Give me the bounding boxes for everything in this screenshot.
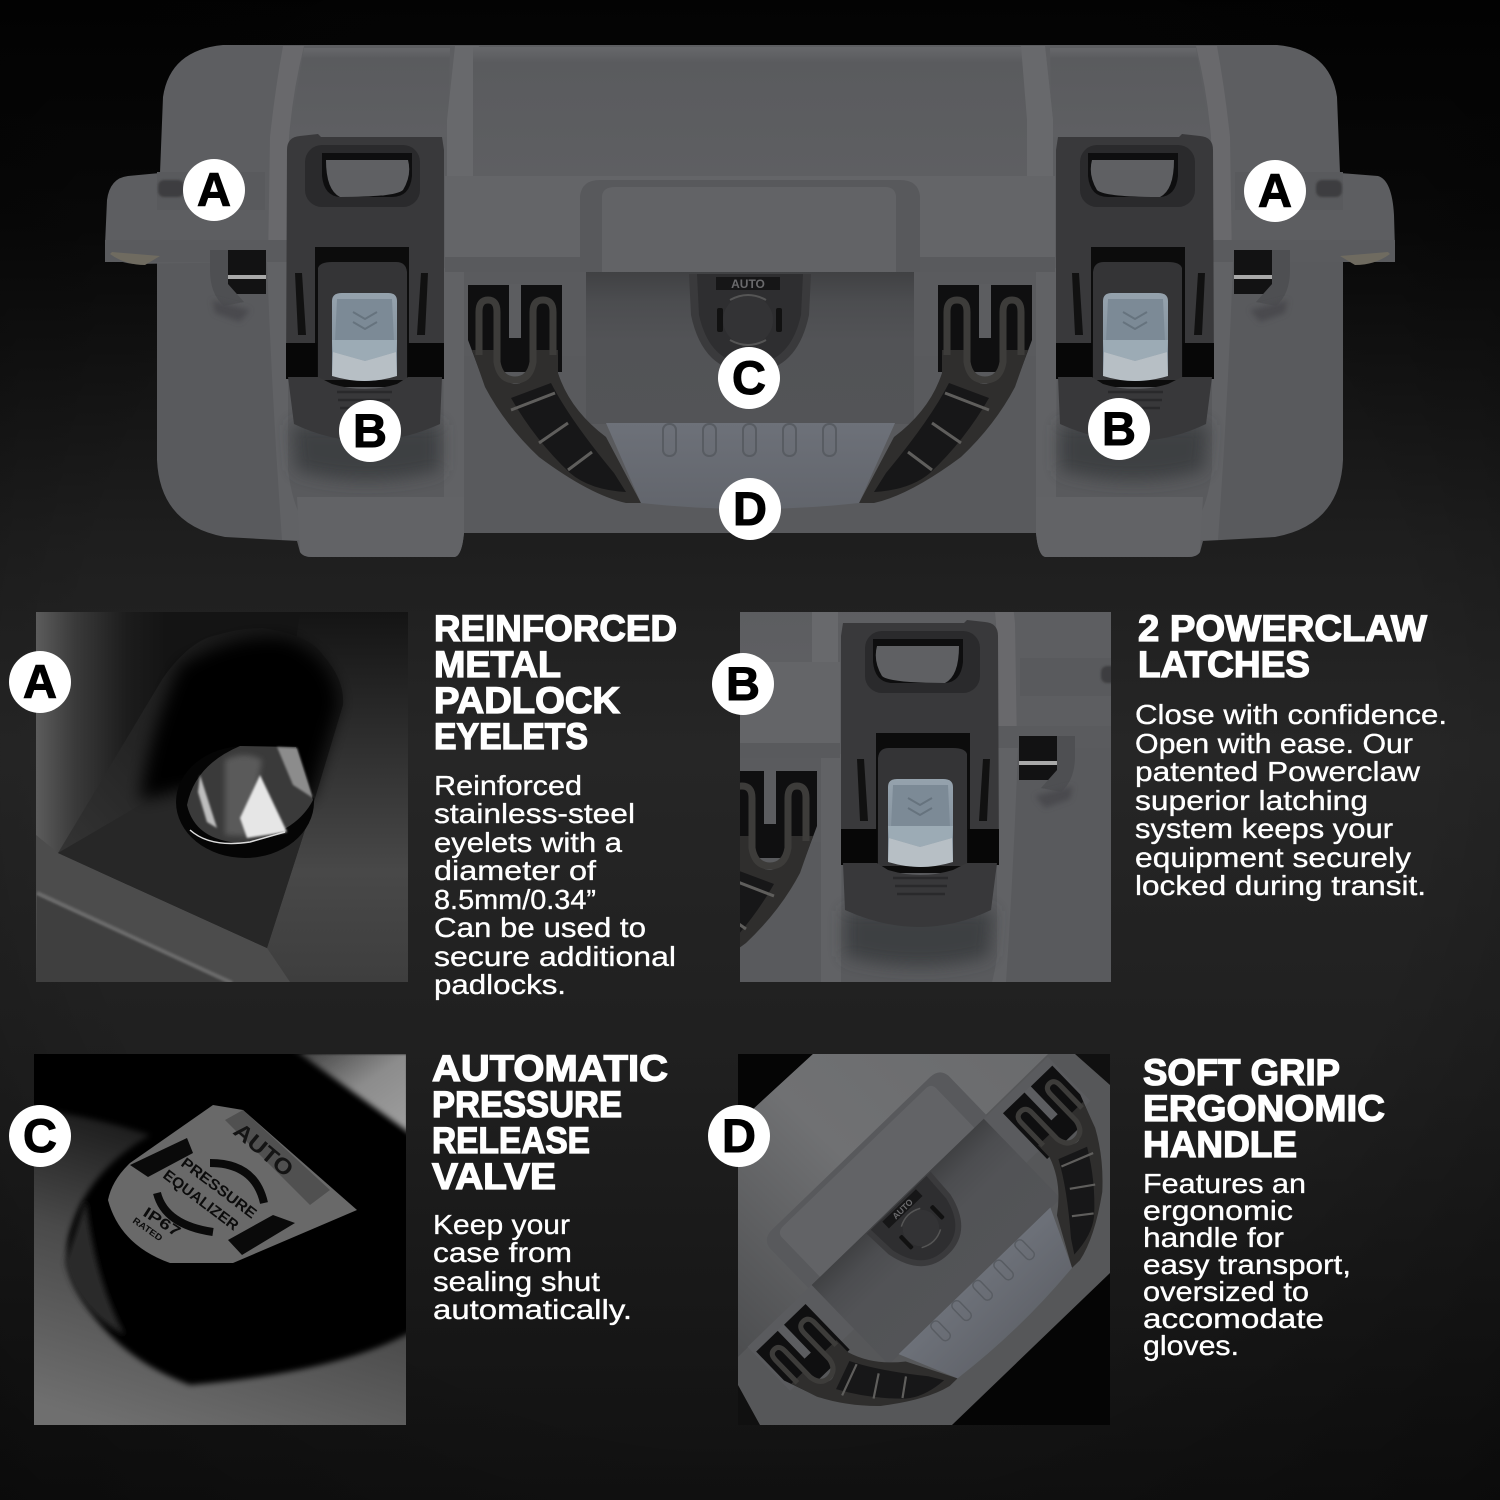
lid inner rib xyxy=(447,46,479,176)
heading D xyxy=(1143,1052,1385,1165)
heading B xyxy=(1138,608,1427,685)
body text D xyxy=(1143,1168,1351,1361)
dark valve body xyxy=(25,1045,415,1385)
valve face: AUTO xyxy=(229,1118,298,1182)
heading C xyxy=(432,1048,668,1197)
badge B left: B xyxy=(353,404,387,457)
heading A: PADLOCK xyxy=(434,680,620,721)
ear underside xyxy=(110,252,160,265)
ear padlock slot xyxy=(158,180,184,197)
latch grip opening xyxy=(305,145,420,207)
badge D panel: D xyxy=(722,1109,756,1162)
valve face: EQUALIZER xyxy=(160,1167,242,1234)
ear ledge xyxy=(157,172,265,210)
badge A panel xyxy=(9,651,71,713)
arm window xyxy=(511,383,626,492)
badge A panel: A xyxy=(23,655,57,708)
lid outer rib xyxy=(268,46,304,262)
pocket xyxy=(468,285,562,372)
latch xyxy=(286,134,444,441)
latch shadow xyxy=(292,425,440,480)
metal eyelet xyxy=(176,746,314,858)
badge A left: A xyxy=(197,163,231,216)
valve face: RATED xyxy=(131,1215,165,1243)
body text B: patented Powerclaw xyxy=(1135,756,1421,787)
body text B xyxy=(1135,699,1447,901)
badge D: D xyxy=(733,482,767,535)
badge D xyxy=(719,478,781,540)
case lid with padlock ears xyxy=(105,45,1395,272)
soft grip handle xyxy=(606,423,895,509)
badge A right xyxy=(1244,160,1306,222)
body text C: automatically. xyxy=(433,1294,632,1325)
handle arm xyxy=(464,272,641,503)
body text C: case from xyxy=(433,1237,572,1268)
body text A: stainless-steel xyxy=(434,798,635,829)
badge A right: A xyxy=(1258,164,1292,217)
body rib right xyxy=(443,268,464,497)
panel D: handle photo xyxy=(738,1054,1110,1425)
lid panel between ribs xyxy=(289,48,450,137)
badge D panel xyxy=(708,1105,770,1167)
pressure valve xyxy=(689,274,811,372)
body text D: ergonomic xyxy=(1143,1195,1293,1226)
body text B: Close with confidence. xyxy=(1135,699,1447,730)
body text B: locked during transit. xyxy=(1135,870,1426,901)
body text A: eyelets with a xyxy=(434,827,622,858)
heading C: VALVE xyxy=(432,1156,556,1197)
heading B: 2 POWERCLAW xyxy=(1138,608,1427,649)
lower lit surface xyxy=(36,835,290,982)
body text D: handle for xyxy=(1143,1222,1284,1253)
bracket xyxy=(464,272,586,356)
latch plate xyxy=(286,134,444,378)
badge B left xyxy=(339,400,401,462)
body text D: oversized to xyxy=(1143,1276,1309,1307)
body text D: gloves. xyxy=(1143,1330,1239,1361)
body text A: Reinforced xyxy=(434,770,582,801)
body text A xyxy=(434,770,676,1000)
lid center panel xyxy=(473,47,1027,176)
badge C: C xyxy=(732,351,766,404)
heading A: EYELETS xyxy=(434,716,588,757)
valve face xyxy=(108,1105,357,1263)
body text C xyxy=(433,1209,632,1325)
valve face: IP67 xyxy=(140,1204,183,1241)
eyelet recess xyxy=(58,643,343,907)
body text B: Open with ease. Our xyxy=(1135,728,1413,759)
latch release button xyxy=(332,293,397,381)
body text C: sealing shut xyxy=(433,1266,600,1297)
badge C panel: C xyxy=(23,1109,57,1162)
body text A: secure additional xyxy=(434,941,676,972)
badge B panel xyxy=(712,653,774,715)
body text A: padlocks. xyxy=(434,969,566,1000)
panel B: latch photo xyxy=(740,612,1111,982)
heading B: LATCHES xyxy=(1138,644,1310,685)
heading C: PRESSURE xyxy=(432,1084,622,1125)
foot block xyxy=(297,497,464,557)
body text D: accomodate xyxy=(1143,1303,1324,1334)
heading D: ERGONOMIC xyxy=(1143,1088,1385,1129)
heading A: REINFORCED xyxy=(434,608,677,649)
valve face: PRESSURE xyxy=(178,1155,260,1222)
heading A xyxy=(434,608,677,757)
mirrored right side xyxy=(859,46,1395,557)
badge C panel xyxy=(9,1105,71,1167)
badge A left xyxy=(183,159,245,221)
body text D: Features an xyxy=(1143,1168,1306,1199)
body text B: system keeps your xyxy=(1135,813,1393,844)
heading A: METAL xyxy=(434,644,561,685)
lid rib right fill xyxy=(1021,46,1053,176)
lid front band xyxy=(445,176,1055,258)
body text A: 8.5mm/0.34” xyxy=(434,884,596,915)
arm loops xyxy=(479,300,553,380)
badge B right xyxy=(1088,398,1150,460)
badge B panel: B xyxy=(726,657,760,710)
carry handle top bar xyxy=(580,180,920,272)
case lower body xyxy=(157,255,1343,557)
center recess xyxy=(586,272,914,424)
panel A: padlock eyelet photo xyxy=(36,612,408,983)
arm body xyxy=(472,350,641,503)
heading D: HANDLE xyxy=(1143,1124,1297,1165)
body text A: diameter of xyxy=(434,855,596,886)
heading C: AUTOMATIC xyxy=(432,1048,668,1089)
body text B: equipment securely xyxy=(1135,842,1411,873)
callout badges on case xyxy=(183,159,1306,540)
body text B: superior latching xyxy=(1135,785,1368,816)
body text A: Can be used to xyxy=(434,912,646,943)
body text C: Keep your xyxy=(433,1209,570,1240)
panel C: pressure valve photo xyxy=(25,1045,415,1425)
heading D: SOFT GRIP xyxy=(1143,1052,1340,1093)
badge B right: B xyxy=(1102,402,1136,455)
body rib left xyxy=(267,262,300,540)
heading C: RELEASE xyxy=(432,1120,590,1161)
product photo: case front xyxy=(105,45,1395,557)
badge C xyxy=(718,347,780,409)
latch flap xyxy=(288,377,442,441)
body text D: easy transport, xyxy=(1143,1249,1351,1280)
pressure valve: AUTO xyxy=(731,277,765,291)
hinge pocket xyxy=(226,250,266,294)
latch lever pocket xyxy=(315,247,409,387)
